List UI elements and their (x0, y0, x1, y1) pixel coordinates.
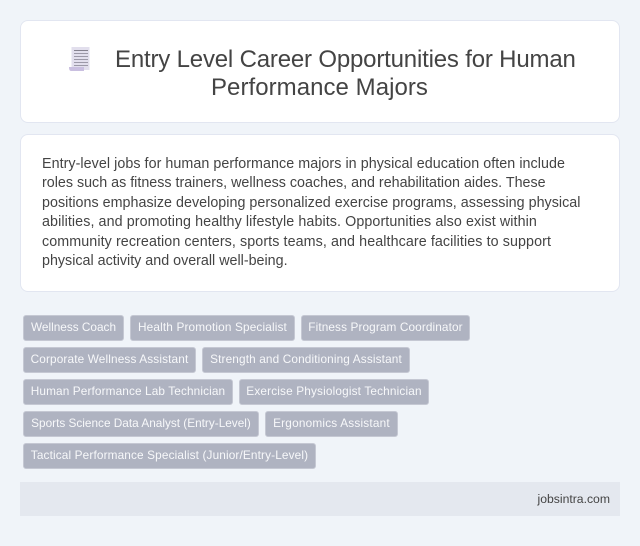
tag (23, 347, 196, 372)
tag: Exercise Physiologist Technician (246, 384, 422, 398)
tag: Wellness Coach (31, 320, 116, 334)
text block: description: community recreation centers, sports teams, and healthcare facilities to support (42, 234, 551, 250)
text block: description: abilities, and promoting healthy lifestyle habits. Opportunities also exist within (42, 214, 537, 230)
text block: description: positions emphasize developing personalized exercise programs, assessing physical (42, 194, 580, 210)
tag: Health Promotion Specialist (138, 320, 287, 334)
tag: Tactical Performance Specialist (Junior/Entry-Level) (31, 448, 308, 462)
icon: paper scroll (69, 47, 90, 71)
tag (239, 379, 429, 404)
panel: description card (20, 134, 620, 292)
title line 2: Performance Majors (211, 74, 428, 101)
tag (23, 379, 233, 404)
footer bar (20, 482, 620, 516)
tag (202, 347, 410, 372)
title: Entry Level Career Opportunities for Human (115, 46, 576, 73)
tag (23, 411, 259, 436)
tag: Human Performance Lab Technician (31, 384, 225, 398)
tag: Corporate Wellness Assistant (31, 352, 188, 366)
footer text: jobsintra.com (538, 492, 610, 506)
text block: description (42, 156, 580, 269)
tag (265, 411, 398, 436)
tag: Sports Science Data Analyst (Entry-Level) (31, 416, 251, 430)
tag: Ergonomics Assistant (273, 416, 390, 430)
panel: title card (20, 20, 620, 123)
tag (23, 315, 124, 340)
text block: description: Entry-level jobs for human performance majors in physical education often include (42, 156, 565, 172)
tag (301, 315, 470, 340)
tag (130, 315, 295, 340)
tag: Fitness Program Coordinator (308, 320, 463, 334)
text block: description: physical activity and overall well-being. (42, 253, 288, 269)
text block: description: roles such as fitness trainers, wellness coaches, and rehabilitation aides. These (42, 175, 546, 191)
tag (23, 443, 316, 468)
tag: Strength and Conditioning Assistant (210, 352, 402, 366)
